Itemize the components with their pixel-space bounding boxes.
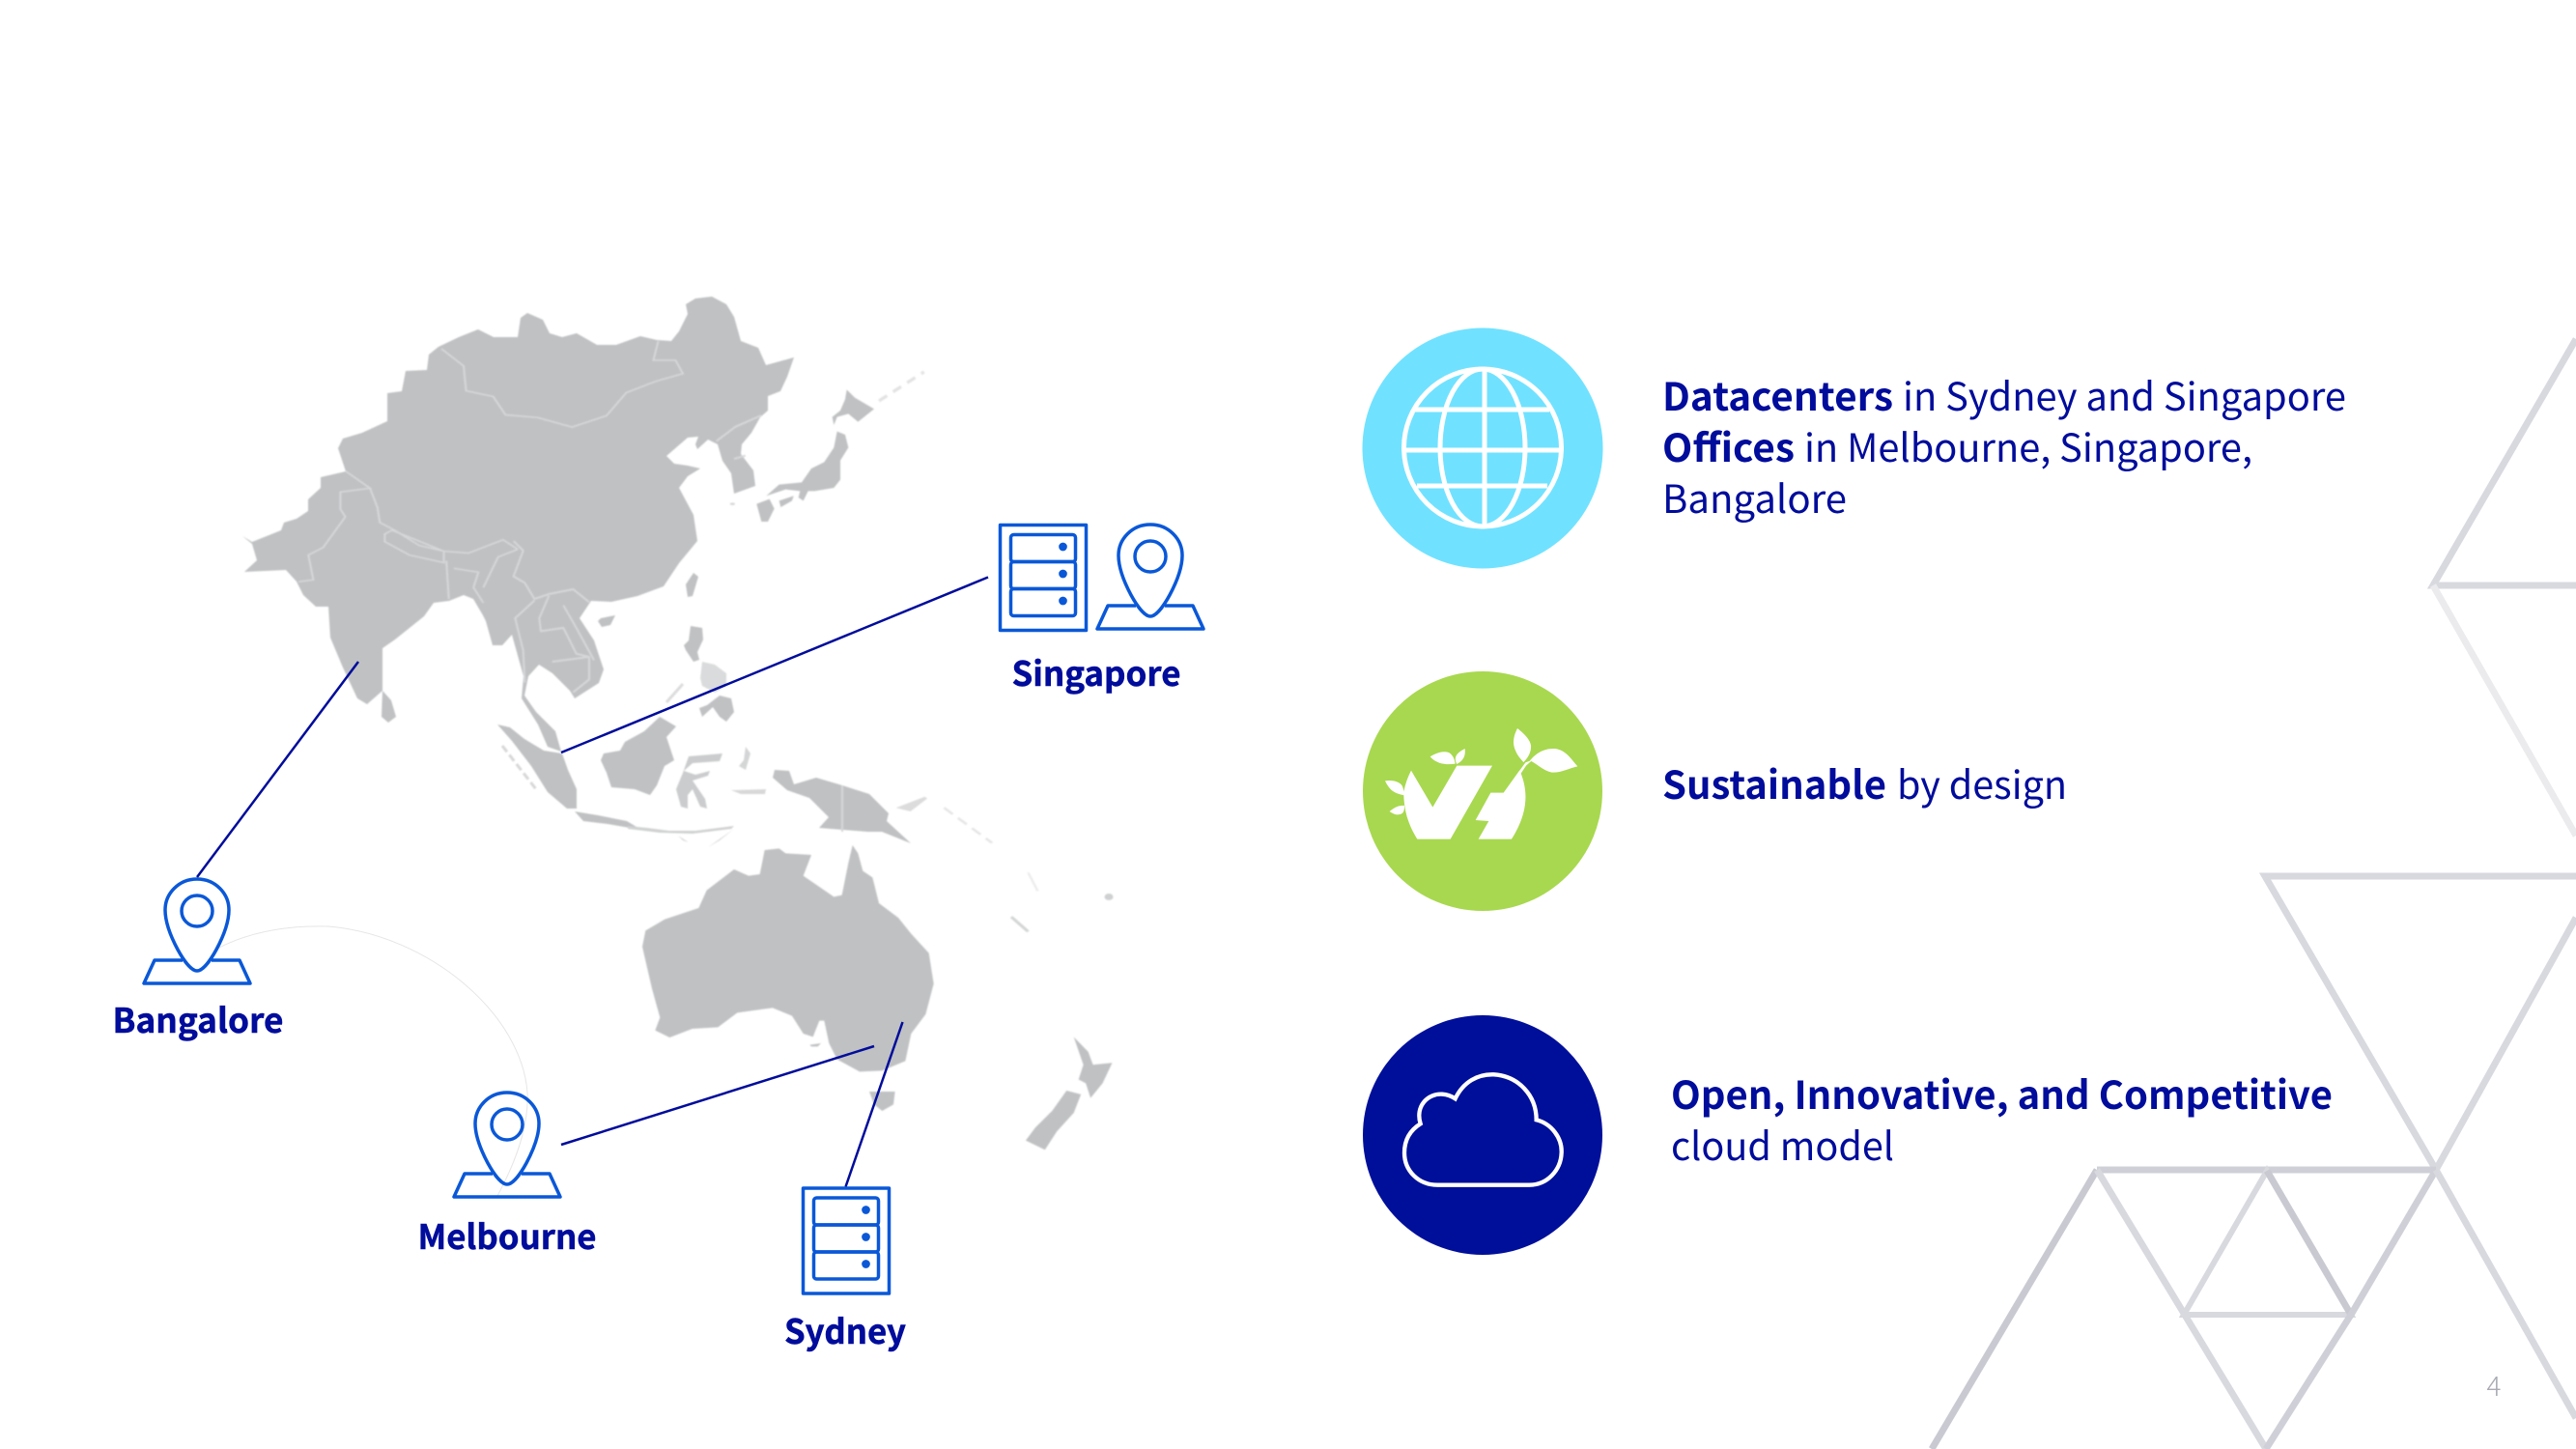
faint arc — [215, 926, 527, 1196]
text: sustainable by design: by design — [1897, 754, 2067, 810]
map: South-East Asia islands — [382, 573, 911, 847]
connector: Sydney — [846, 1022, 902, 1186]
icon: sustainable check and lightning with leaves — [1363, 671, 1602, 911]
connector: Bangalore — [197, 662, 358, 877]
text: sustainable by design — [1662, 754, 2067, 810]
text: datacenters and offices: Offices — [1662, 417, 1795, 473]
text: datacenters and offices: Datacenters — [1662, 366, 1893, 422]
connector lines — [197, 578, 988, 1186]
connector: Singapore — [561, 578, 988, 753]
icon: Melbourne pin — [454, 1093, 560, 1197]
text: open innovative competitive cloud model: Open, Innovative, and Competitive — [1671, 1065, 2333, 1121]
map of Asia Pacific — [242, 297, 1113, 1150]
label: Sydney: Sydney — [784, 1305, 906, 1354]
map: Asia mainland — [242, 297, 794, 752]
icon: Sydney server — [804, 1188, 889, 1293]
text: sustainable by design: Sustainable — [1662, 754, 1886, 810]
icon: Singapore server — [1001, 526, 1086, 630]
connector: Melbourne — [561, 1046, 874, 1145]
label: Melbourne: Melbourne — [417, 1210, 597, 1260]
background triangles — [1932, 339, 2576, 1449]
location: Singapore — [1001, 525, 1203, 696]
map: Australia and Tasmania — [642, 845, 934, 1111]
text: datacenters and offices: Bangalore — [1662, 469, 1847, 525]
text: datacenters and offices: in Sydney and Singapore — [1903, 366, 2346, 422]
label: Singapore: Singapore — [1012, 647, 1180, 696]
label: Bangalore: Bangalore — [112, 994, 284, 1043]
text: open innovative competitive cloud model — [1671, 1065, 2333, 1172]
text: datacenters and offices: in Melbourne, Singapore, — [1804, 417, 2252, 473]
location: Melbourne — [417, 1093, 597, 1260]
location: Sydney — [784, 1188, 906, 1354]
location: Bangalore — [112, 879, 284, 1043]
icon: Singapore pin — [1097, 525, 1203, 629]
map: New Zealand and Pacific islands — [896, 797, 1113, 1150]
icon: globe — [1362, 328, 1603, 568]
text: open innovative competitive cloud model: cloud model — [1671, 1116, 1894, 1172]
text: datacenters and offices — [1662, 366, 2346, 525]
map: East Asia islands — [730, 372, 924, 522]
icon: Bangalore pin — [144, 879, 250, 983]
icon: cloud — [1363, 1015, 1602, 1255]
map: country borders — [298, 341, 761, 756]
page number: 4 — [2487, 1366, 2502, 1405]
